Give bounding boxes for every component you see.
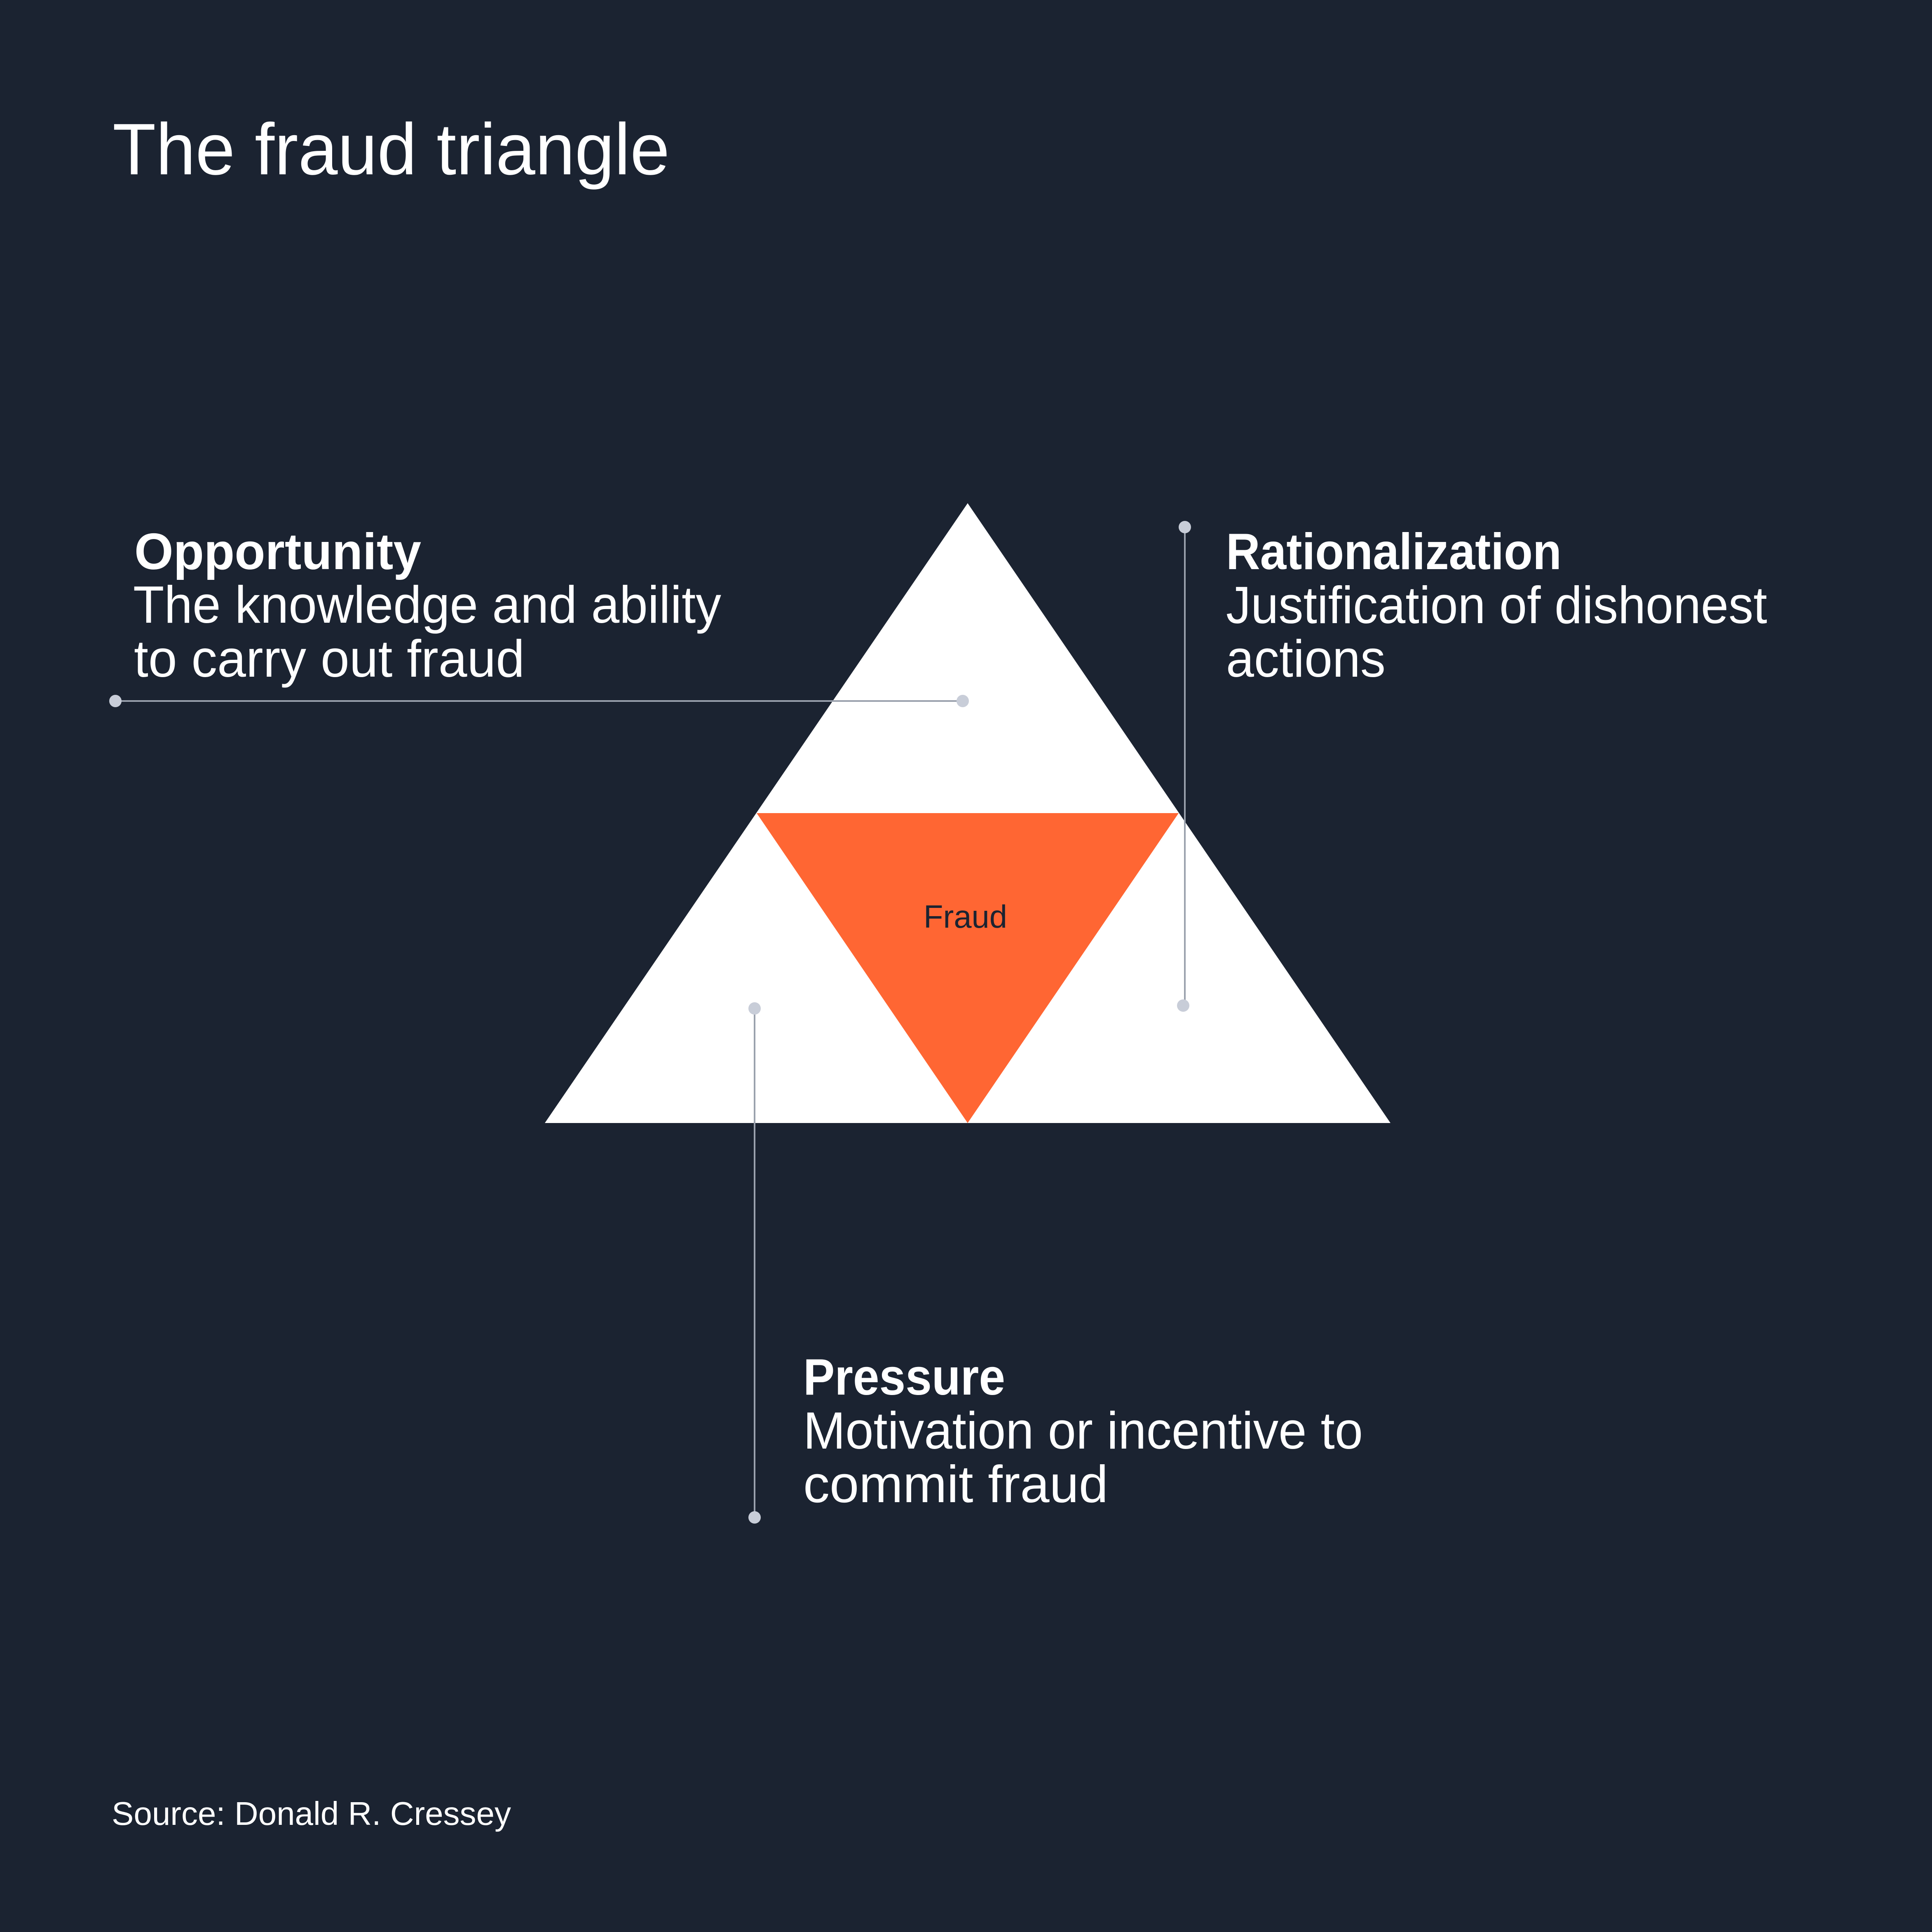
title: The fraud triangle — [113, 108, 670, 190]
fraud label: Fraud — [924, 898, 1007, 935]
connector: pressure — [748, 1002, 761, 1524]
text block: opportunity: to carry out fraud — [134, 629, 525, 688]
outer white triangle — [545, 503, 1390, 1123]
text block: opportunity: The knowledge and ability — [133, 575, 721, 634]
connector: opportunity — [109, 695, 969, 707]
text block: pressure: Motivation or incentive to — [803, 1401, 1363, 1460]
text block: pressure: commit fraud — [803, 1455, 1108, 1513]
connector: rationalization — [1177, 521, 1191, 1012]
diagram: fraud triangle — [545, 503, 1390, 1123]
text block: pressure — [803, 1349, 1363, 1513]
text block: rationalization: Justification of dishonest — [1226, 576, 1767, 634]
text block: opportunity: Opportunity — [134, 523, 421, 580]
source note: Source: Donald R. Cressey — [112, 1795, 511, 1832]
text block: pressure: Pressure — [803, 1349, 1005, 1406]
inner orange fraud triangle — [757, 813, 1179, 1123]
text block: rationalization — [1226, 523, 1767, 688]
text block: opportunity — [133, 523, 721, 688]
text block: rationalization: actions — [1226, 629, 1386, 688]
text block: rationalization: Rationalization — [1226, 523, 1562, 580]
